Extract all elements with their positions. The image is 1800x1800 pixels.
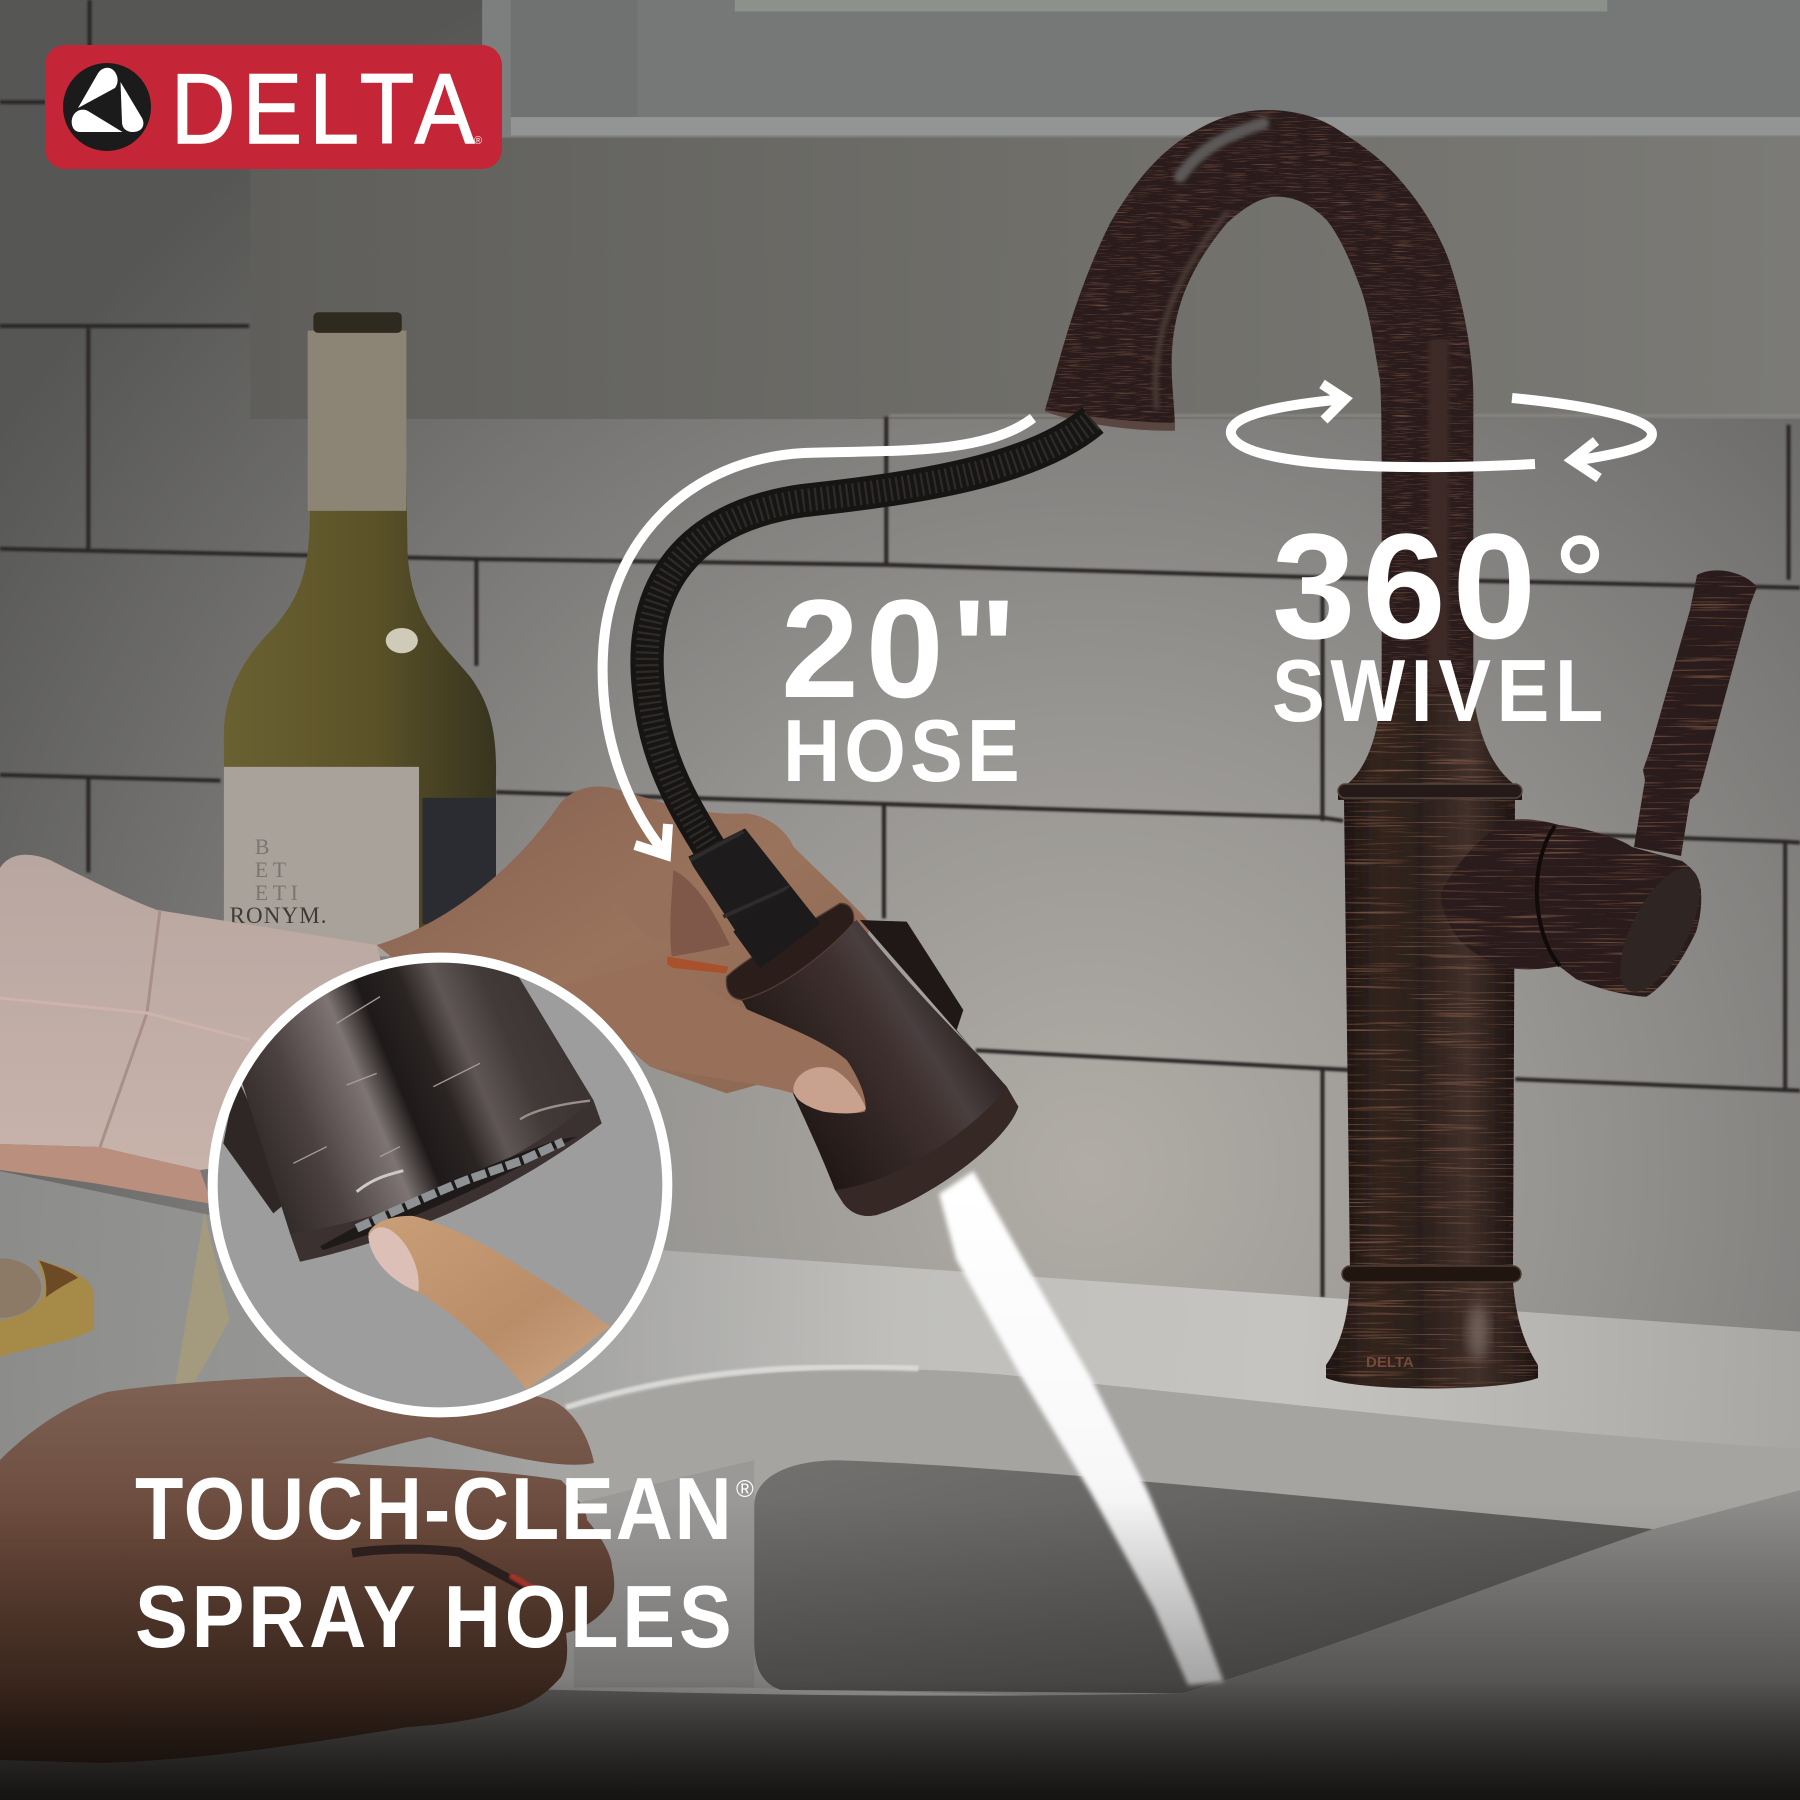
swivel rotation arrows [1231, 384, 1652, 478]
window frame [482, 0, 1800, 138]
spout highlight [1180, 123, 1263, 177]
circle fill [217, 962, 663, 1408]
sink lip highlight [566, 1367, 918, 1407]
touch-clean label: ® [736, 1476, 754, 1503]
countertop [0, 1171, 1800, 1800]
bottle label [224, 767, 419, 956]
pull-down sprayer head [560, 828, 1018, 1216]
water stream [939, 1171, 1224, 1685]
circle ring [213, 958, 667, 1412]
braided hose [647, 420, 1093, 855]
swivel label: 360 [1272, 502, 1536, 670]
handle lever [1634, 570, 1757, 856]
shirt sleeve [0, 855, 385, 1204]
bottle foil capsule [308, 331, 406, 511]
bottle label: ET [255, 858, 291, 882]
sprayer button [860, 920, 973, 1050]
hose length label: 20" [781, 570, 1017, 727]
neck sheen [1428, 340, 1448, 687]
lower hand [0, 1377, 614, 1763]
acrylic stand [174, 1212, 230, 1391]
registered mark: ® [474, 135, 482, 147]
collar ring [1338, 784, 1522, 798]
hose length arrow [603, 418, 1033, 855]
touch-clean label: SPRAY HOLES [135, 1567, 732, 1666]
faucet [1045, 110, 1757, 1388]
spout and neck [1045, 110, 1473, 693]
fingertip [368, 1216, 610, 1390]
sprayer collar [726, 903, 854, 1000]
handle hub [1441, 819, 1701, 997]
handle groove [1537, 826, 1560, 966]
ring on lower hand [352, 1549, 535, 1590]
side button of sprayer [223, 1086, 282, 1214]
cuff underside [0, 1144, 212, 1204]
swivel label: SWIVEL [1272, 641, 1603, 740]
bottle label: B [255, 835, 269, 859]
inner edge sheen [1155, 213, 1227, 407]
wall panel under window [250, 138, 1800, 419]
base [1326, 1282, 1538, 1388]
flare and collar [1338, 690, 1522, 800]
finger shadow [670, 870, 730, 957]
wooden board at left [0, 1258, 94, 1357]
thumb over sprayer [560, 960, 866, 1113]
spout nozzle ring [1045, 410, 1175, 431]
orange reflection [667, 957, 728, 973]
logo emblem [63, 63, 151, 151]
wine bottle [224, 312, 496, 956]
hose length label [781, 570, 1020, 800]
logo wordmark: DELTA [171, 54, 474, 164]
inner finger [623, 863, 675, 943]
touch-clean label: TOUCH-CLEAN [135, 1459, 732, 1558]
connector base [733, 887, 820, 968]
fingernail [368, 1227, 419, 1292]
sprayer head close-up [230, 947, 602, 1262]
bottom vignette [0, 1500, 1800, 1800]
logo red badge [45, 45, 502, 169]
brushed highlights [293, 997, 480, 1163]
front counter [0, 1490, 1800, 1800]
hose length label: HOSE [783, 701, 1020, 800]
swivel label: ° [1554, 509, 1606, 655]
bottle label: ETI [255, 881, 303, 905]
sink basin [754, 1460, 1653, 1693]
touch-clean zoom circle [213, 947, 667, 1412]
sprayer rim [290, 1100, 602, 1262]
spray holes [320, 1137, 577, 1250]
sprayer rim [835, 1088, 1018, 1216]
swivel label [1272, 502, 1606, 740]
body column [1344, 800, 1515, 1270]
touch-clean label [135, 1459, 754, 1666]
hose connector [688, 828, 820, 968]
bottle label: RONYM. [230, 903, 328, 928]
bottle top [313, 312, 402, 333]
upper hand back [377, 786, 870, 1093]
handle end cap [1604, 857, 1716, 1003]
tile grout lines [0, 0, 1800, 1297]
faucet base logo: DELTA [1366, 1354, 1414, 1371]
logo [45, 45, 502, 169]
inner sink wall [574, 1460, 754, 1688]
thumb nail [793, 1067, 866, 1113]
sink lip [563, 1369, 1800, 1699]
base ring [1342, 1266, 1521, 1282]
sprayer body [742, 920, 1018, 1216]
